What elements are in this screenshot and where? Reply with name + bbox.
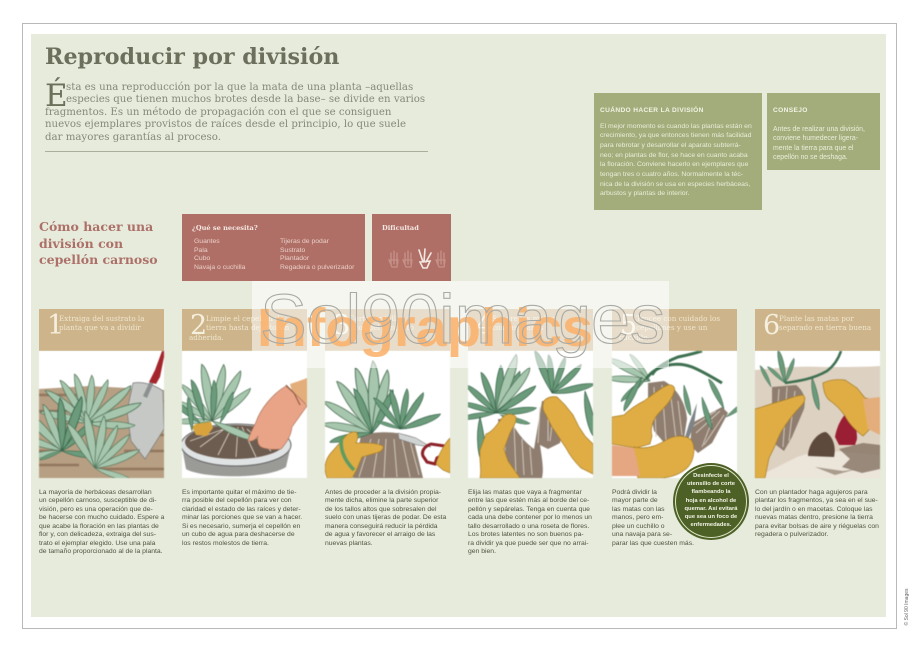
step 3 header: 3 [333, 310, 350, 341]
panel: dificultad: Dificultad [382, 224, 419, 232]
panel: qué se necesita: Sustrato [280, 247, 305, 254]
step 4 text: Elija las matas que vaya a fragmentar [468, 488, 582, 496]
step 4 header: 4 [476, 310, 493, 341]
step 6 text: Con un plantador haga agujeros para [755, 488, 868, 496]
panel: qué se necesita [182, 214, 365, 281]
panel: cuándo hacer la división: la floración. Conviene hacerlo en ejemplares que [600, 161, 748, 168]
step 1 header: 1 [47, 310, 64, 341]
step 4 text: Los brotes latentes no son buenos pa- [468, 531, 584, 538]
step 5 header: cepellones y use un [636, 323, 707, 332]
step 2 text: minar las porciones que se van a hacer. [182, 514, 302, 521]
callout: disinfect tip: quemar. Así evitará [685, 506, 737, 512]
intro text block: especies que tienen muchos brotes desde la base– se divide en varios [66, 94, 425, 105]
step 4 text: tallo desarrollado o una roseta de flores. [468, 523, 589, 530]
intro text block: É [45, 78, 68, 114]
step 2 text: claridad el estado de las raíces y deter- [182, 506, 301, 513]
step 2 header [182, 309, 307, 351]
step 5 text [612, 488, 694, 547]
panel: dificultad [372, 214, 451, 281]
illustration: step 4 [467, 350, 594, 479]
panel: consejo: Antes de realizar una división, [773, 126, 865, 133]
illustration: step 5 [611, 350, 738, 479]
step 2 text: un cubo de agua para deshacerse de [182, 531, 295, 538]
panel: cuándo hacer la división: nica de la división se usa en especies herbáceas, [600, 181, 750, 188]
panel: qué se necesita: Pala [194, 247, 208, 254]
step 5 header: Trocee con cuidado los [636, 314, 720, 323]
step 1 text: La mayoría de herbáceas desarrollan [39, 488, 152, 496]
step 1 header: Extraiga del sustrato la [59, 314, 145, 323]
step 3 header [325, 309, 450, 351]
section heading [39, 219, 158, 267]
step 3 text: Antes de proceder a la división propia- [325, 488, 441, 496]
step 6 header: 6 [763, 310, 780, 341]
callout: disinfect tip: hoja en alcohol de [686, 498, 736, 504]
step 6 header: Plante las matas por [779, 314, 854, 323]
step 5 text: parar las que cuesten más. [612, 540, 694, 547]
callout: disinfect tip: utensilio de corte [687, 481, 735, 487]
panel: qué se necesita: Regadera o pulverizador [280, 264, 354, 271]
step 3 text [325, 488, 446, 547]
step 5 header [612, 309, 737, 351]
step 6 text: para evitar bolsas de aire y riéguelas con [755, 523, 879, 530]
panel: qué se necesita: Guantes [194, 238, 220, 245]
step 6 header: separado en tierra buena [779, 323, 871, 332]
step 6 text: lo del jardín o en macetas. Coloque las [755, 506, 873, 513]
watermark: Infographics [257, 298, 593, 358]
section heading: cepellón carnoso [39, 252, 158, 267]
step 2 text: rra posible del cepellón para ver con [182, 497, 292, 504]
panel: cuándo hacer la división [594, 93, 762, 210]
illustration: step 1 [38, 350, 165, 479]
step 2 header: tierra hasta dejarlo sin [206, 323, 289, 332]
step 4 text: cada una debe contener por lo menos un [468, 514, 592, 521]
step 4 header: Separe las matas [492, 314, 555, 323]
step 5 text: mayor parte de [612, 497, 658, 504]
intro rule [45, 151, 428, 152]
step 6 text: nuevas matas dentro, presione la tierra [755, 514, 873, 521]
step 3 header: altos del conjunto [349, 323, 414, 332]
step 5 text: Podrá dividir la [612, 488, 657, 496]
step 3 text: de agua y favorecer el arraigo de las [325, 531, 435, 538]
step 3 text: suelo con unas tijeras de podar. De esta [325, 514, 446, 521]
intro text block: nuevos ejemplares provistos de raíces desde el principio, lo que suele [45, 119, 406, 130]
panel: consejo: cepellón no se deshaga. [773, 154, 848, 161]
step 2 header: adherida. [189, 333, 224, 342]
step 4 text [468, 488, 592, 555]
callout: disinfect tip: flambeando la [692, 489, 730, 495]
step 1 text: trato el ejemplar elegido. Use una pala [39, 540, 155, 547]
section heading: división con [39, 236, 123, 251]
callout: disinfect tip: que sea un foco de [685, 514, 737, 520]
step 1 text: be hacerse con mucho cuidado. Espere a [39, 514, 164, 521]
step 3 text: de los tallos altos que sobresalen del [325, 506, 436, 513]
illustration: step 3 [324, 350, 451, 479]
step 5 header: cuchillo. [619, 333, 650, 342]
step 5 text: plee un cuchillo o [612, 523, 665, 530]
illustration: step 6 [754, 350, 881, 479]
intro text block: fragmentos. Es un método de propagación con el que se consiguen [45, 107, 391, 118]
step 5 text: las matas con las [612, 506, 665, 513]
step 1 text [39, 488, 164, 555]
step 2 text [182, 488, 302, 547]
panel: qué se necesita: ¿Qué se necesita? [192, 224, 258, 232]
watermark: Sol90images [260, 281, 665, 358]
step 1 text: que acabe la floración en las plantas de [39, 523, 159, 530]
step 4 header: con las manos [492, 323, 544, 332]
step 4 header [468, 309, 593, 351]
step 3 header: Corte los tallos [349, 314, 404, 323]
icon: difficulty hands [388, 248, 446, 269]
panel: cuándo hacer la división: tengan tres o cuatro años. Normalmente la téc- [600, 171, 743, 178]
step 2 text: los restos molestos de tierra. [182, 540, 269, 547]
step 2 header: 2 [190, 310, 207, 341]
panel: qué se necesita: Cubo [194, 255, 210, 262]
intro text block [45, 77, 425, 143]
step 2 text: Es importante quitar el máximo de tie- [182, 488, 296, 496]
illustration: step 2 [181, 350, 308, 478]
step 4 text: entre las que estén más al borde del ce- [468, 497, 589, 504]
step 6 text [755, 488, 879, 538]
step 3 text: manera conseguirá reducir la pérdida [325, 523, 438, 530]
intro text block: sta es una reproducción por la que la mata de una planta –aquellas [66, 82, 413, 93]
panel: cuándo hacer la división: crecimiento, ya que entonces tienen más facilidad [600, 132, 751, 139]
step 5 header: 5 [620, 310, 637, 341]
step 1 text: flor y, con delicadeza, extraiga del sus- [39, 531, 156, 538]
step 4 text: gen bien. [468, 548, 496, 555]
callout: disinfect tip: Desinfecte el [693, 473, 729, 479]
panel: qué se necesita: Navaja o cuchilla [194, 264, 245, 271]
step 1 header: planta que va a dividir [59, 323, 141, 332]
panel: cuándo hacer la división: arbustos y plantas de interior. [600, 190, 689, 197]
step 2 text: Si es necesario, sumerja el cepellón en [182, 523, 300, 530]
intro text block: dar mayores garantías al proceso. [45, 132, 221, 143]
step 6 header [755, 309, 880, 351]
step 2 header: Limpie el cepellón de [206, 314, 284, 323]
panel: qué se necesita: Plantador [280, 255, 309, 262]
step 3 text: mente dicha, elimine la parte superior [325, 497, 438, 504]
copyright: © Sol 90 Images [904, 588, 910, 626]
step 3 text: nuevas plantas. [325, 540, 373, 547]
step 1 header [39, 309, 164, 351]
title: Reproducir por división [45, 44, 339, 70]
panel: cuándo hacer la división: El mejor momento es cuando las plantas están en [600, 122, 752, 130]
step 5 text: una navaja para se- [612, 531, 672, 538]
step 6 text: regadera o pulverizador. [755, 531, 828, 538]
step 4 text: ra dividir ya que puede ser que no arrai- [468, 540, 589, 547]
panel: consejo: CONSEJO [773, 107, 808, 114]
panel: consejo: conviene humedecer ligera- [773, 135, 858, 142]
callout: disinfect tip: enfermedades. [691, 522, 731, 528]
step 5 text: manos, pero em- [612, 514, 663, 521]
panel: consejo [767, 93, 880, 170]
step 4 text: pellón y sepárelas. Tenga en cuenta que [468, 506, 590, 513]
panel: cuándo hacer la división: neo; en plantas de flor, se hace en cuanto acaba [600, 152, 748, 159]
panel: qué se necesita: Tijeras de podar [280, 238, 329, 245]
panel: cuándo hacer la división: CUÁNDO HACER LA DIVISIÓN [600, 107, 704, 114]
step 6 text: plantar los fragmentos, ya sea en el sue- [755, 497, 878, 504]
panel: consejo: mente la tierra para que el [773, 145, 853, 152]
panel: cuándo hacer la división: para rebrotar y desarrollar el aparato subterrá- [600, 142, 741, 149]
callout: disinfect tip [673, 463, 749, 540]
step 1 text: un cepellón carnoso, susceptible de di- [39, 497, 157, 504]
section heading: Cómo hacer una [39, 219, 153, 234]
step 1 text: de tamaño proporcionado al de la planta. [39, 548, 163, 555]
step 1 text: visión, pero es una operación que de- [39, 506, 153, 513]
